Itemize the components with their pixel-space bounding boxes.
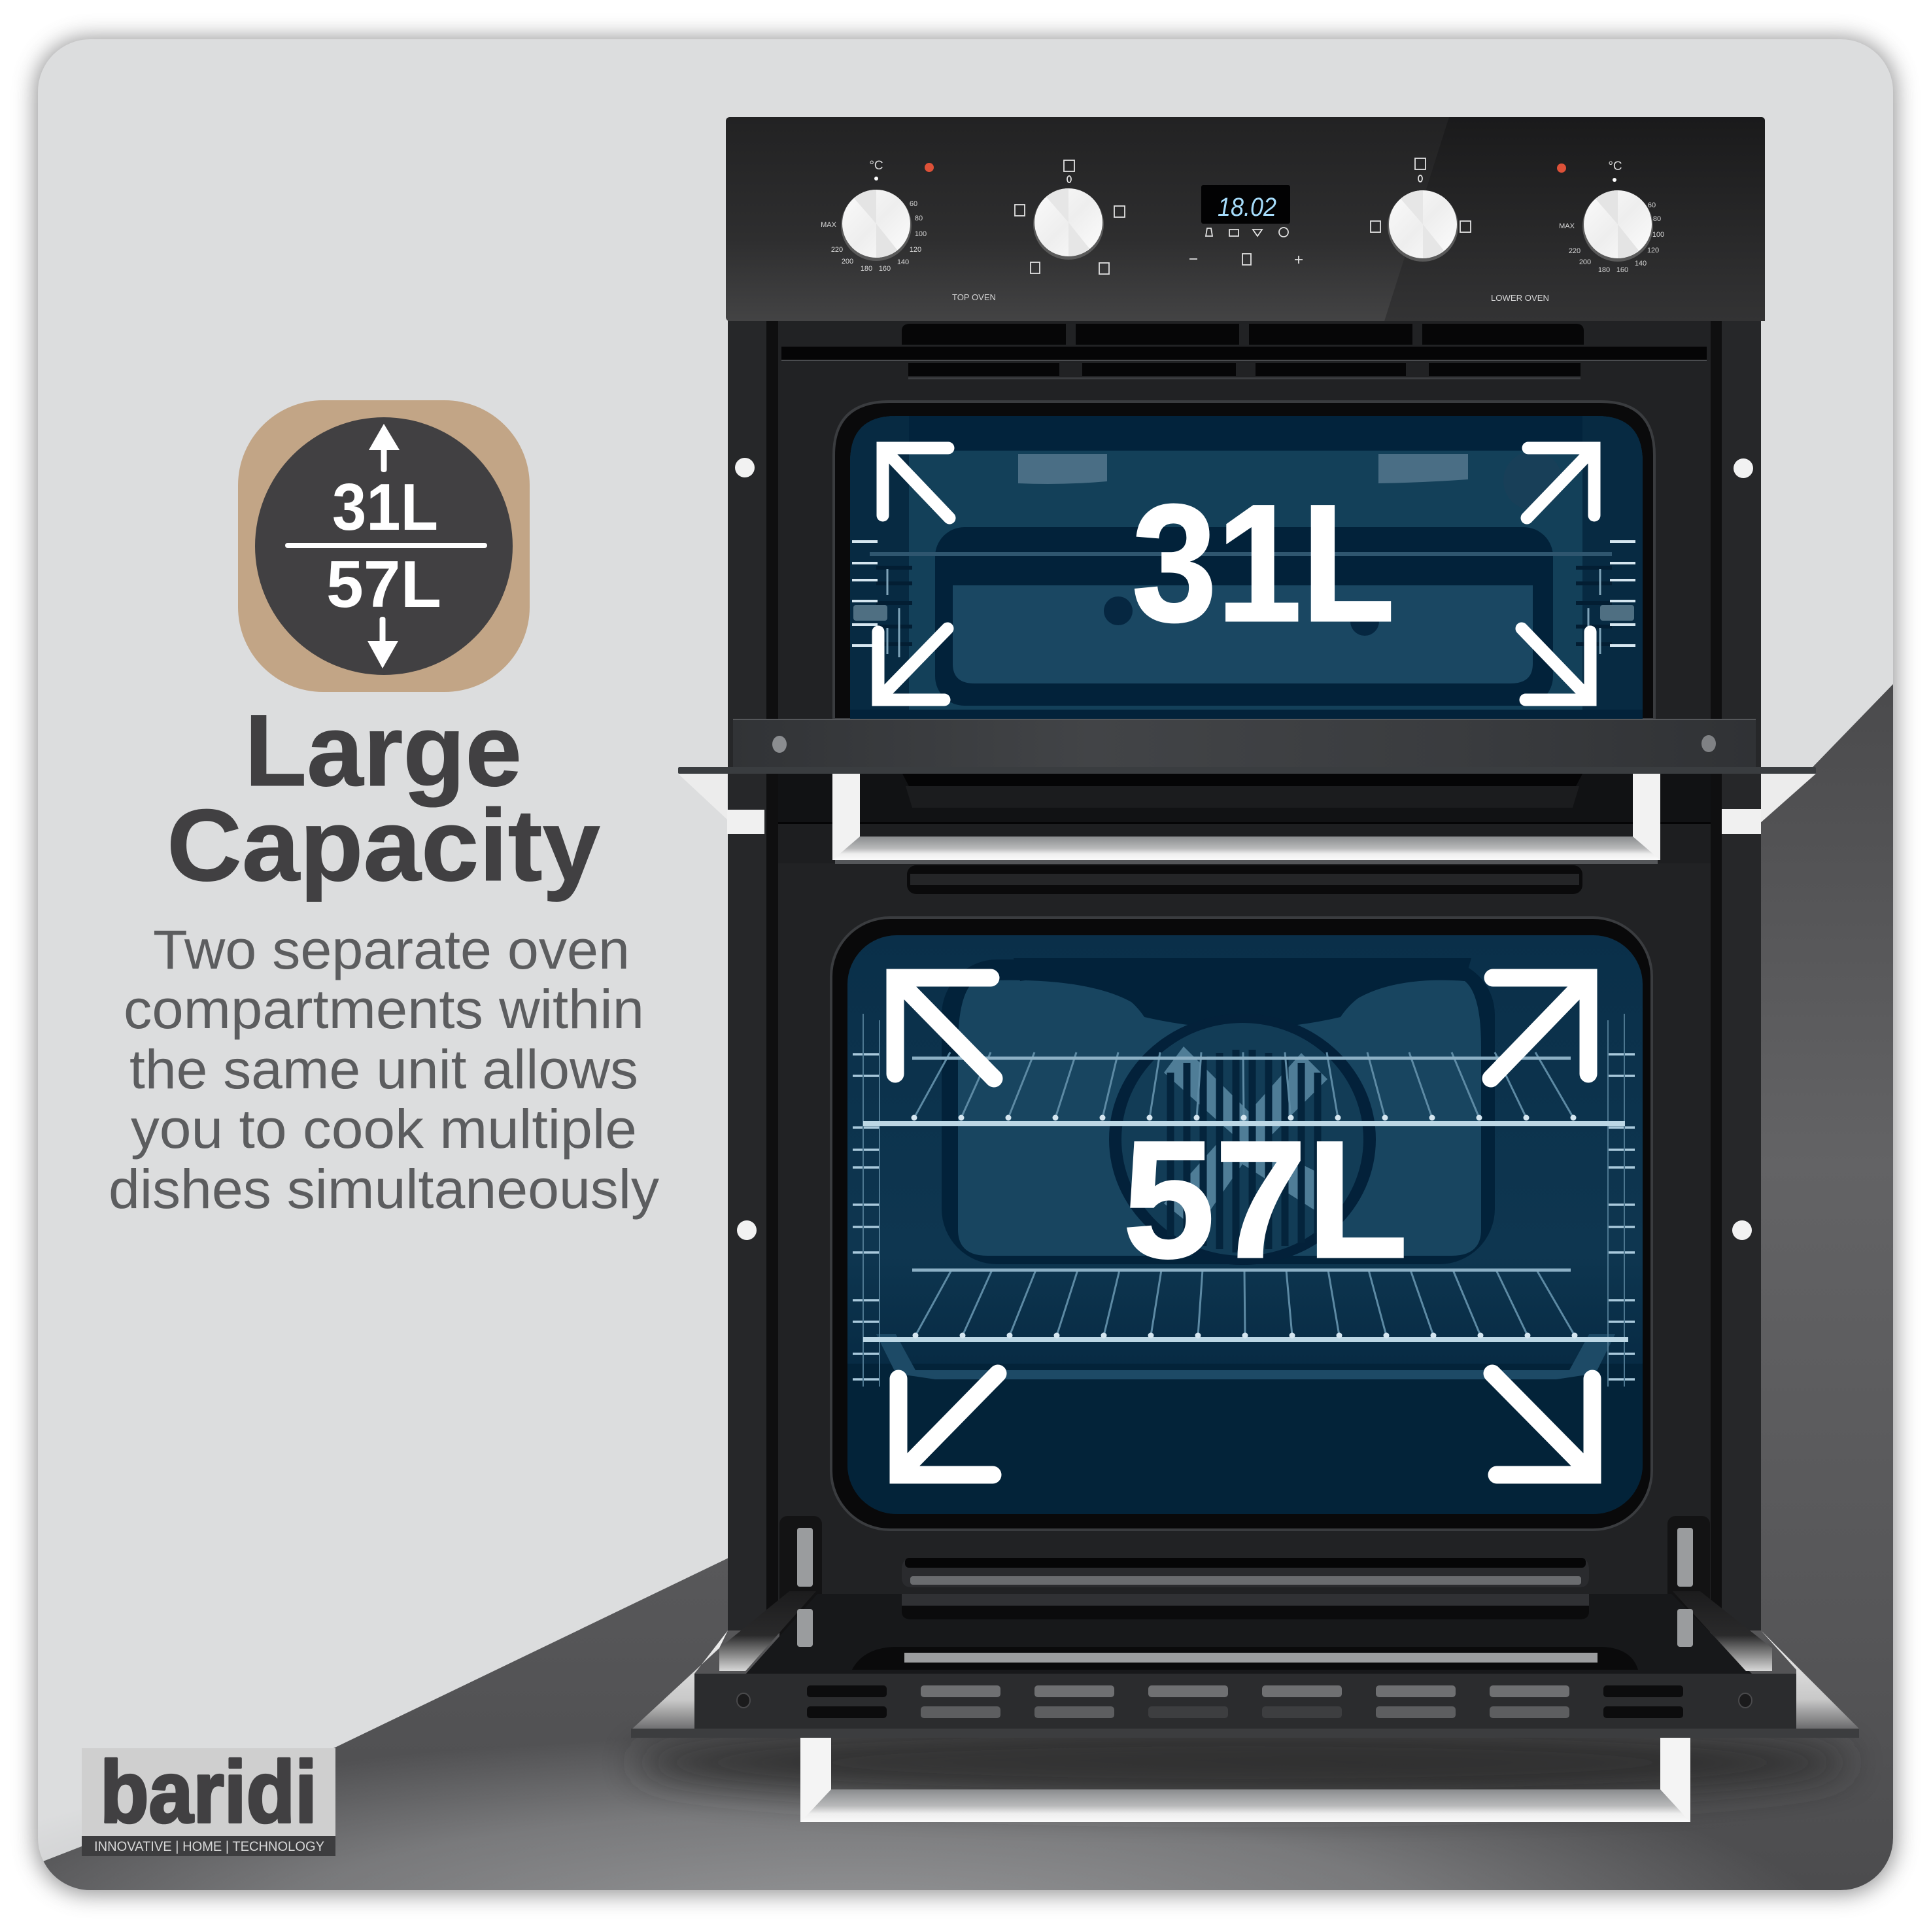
knob: lower function bbox=[1388, 190, 1458, 262]
side rails bbox=[853, 1014, 1635, 1387]
oven rack: top bbox=[863, 1052, 1625, 1124]
lower door handle bbox=[800, 1738, 1690, 1822]
recess behind upper handle bbox=[778, 774, 1711, 863]
label: top oven: TOP OVEN bbox=[952, 292, 996, 302]
oven body bbox=[728, 320, 1761, 1630]
logo: baridi: INNOVATIVE | HOME | TECHNOLOGY bbox=[94, 1839, 324, 1854]
temperature scale: top oven: 80 bbox=[915, 215, 923, 222]
temperature scale: top oven: 200 bbox=[842, 258, 853, 266]
temperature scale: top oven: 180 bbox=[861, 265, 872, 273]
badge: capacity icon bbox=[238, 400, 530, 692]
knob: top temperature bbox=[841, 190, 912, 261]
temperature scale: top oven: °C bbox=[869, 159, 883, 173]
oven bbox=[631, 117, 1859, 1822]
temperature scale: top oven: 140 bbox=[897, 258, 909, 266]
door inner surface bbox=[745, 1594, 1752, 1674]
function icons bbox=[1015, 158, 1471, 274]
indicator lights bbox=[925, 163, 1566, 173]
temperature scale: lower oven: 80 bbox=[1653, 215, 1661, 223]
capacity arrows: upper bbox=[878, 448, 1594, 700]
badge text: 57L: 57L bbox=[326, 548, 441, 621]
dark floor wedge bbox=[38, 684, 1893, 1890]
temperature scale: top oven: MAX bbox=[821, 221, 837, 229]
temperature scale: lower oven: 60 bbox=[1648, 201, 1656, 209]
side rails bbox=[852, 542, 1635, 657]
text: 31L: 31L bbox=[1132, 470, 1395, 657]
badge divider bbox=[285, 543, 487, 548]
logo: baridi: baridi bbox=[100, 1744, 317, 1841]
temperature scale: top oven bbox=[821, 159, 927, 273]
temperature scale: lower oven: 180 bbox=[1598, 266, 1610, 274]
description text: you to cook multiple bbox=[131, 1098, 637, 1160]
description text bbox=[109, 919, 659, 1220]
oven brackets bbox=[1018, 454, 1468, 484]
temperature scale: top oven: 120 bbox=[910, 246, 921, 254]
hinge recesses bbox=[779, 1516, 1710, 1655]
upper door handle bbox=[832, 774, 1660, 864]
description text: dishes simultaneously bbox=[109, 1158, 659, 1220]
heading: Large bbox=[245, 694, 522, 808]
knob: top function bbox=[1033, 188, 1104, 260]
digital display bbox=[1201, 185, 1290, 224]
temperature scale: lower oven: 200 bbox=[1579, 258, 1591, 266]
temperature scale: lower oven: °C bbox=[1608, 160, 1622, 173]
temperature scale: top oven: 60 bbox=[910, 200, 917, 208]
digital display: 18.02 bbox=[1218, 193, 1276, 222]
lower door bbox=[631, 1528, 1859, 1822]
door block with vents bbox=[694, 1674, 1796, 1729]
heading bbox=[167, 694, 600, 903]
baking tray bbox=[935, 527, 1553, 706]
glass reflections beside top door bbox=[678, 774, 1816, 834]
oven rack: bottom bbox=[863, 1270, 1628, 1339]
door side arms bbox=[719, 1591, 1772, 1671]
temperature scale: lower oven: 100 bbox=[1652, 231, 1664, 239]
temperature scale: lower oven: 120 bbox=[1647, 247, 1659, 254]
floor bbox=[847, 1364, 1643, 1514]
icon: down arrow bbox=[367, 617, 398, 668]
temperature scale: lower oven: 220 bbox=[1569, 247, 1581, 255]
temperature scale: top oven: 220 bbox=[831, 246, 843, 254]
description text: Two separate oven bbox=[153, 919, 630, 980]
label: lower oven: LOWER OVEN bbox=[1491, 293, 1549, 303]
heading: Capacity bbox=[167, 789, 600, 903]
middle vent bbox=[907, 865, 1582, 894]
lower vent bbox=[902, 1558, 1589, 1587]
mounting holes bbox=[735, 458, 1753, 1240]
control panel bbox=[726, 117, 1765, 321]
capacity arrows: lower bbox=[895, 978, 1592, 1475]
temperature scale: lower oven bbox=[1559, 160, 1664, 274]
badge text: 31L: 31L bbox=[332, 471, 438, 544]
upper oven window bbox=[834, 402, 1654, 719]
description text: compartments within bbox=[124, 978, 644, 1040]
temperature scale: lower oven: MAX bbox=[1559, 222, 1575, 230]
back wall bbox=[942, 958, 1495, 1264]
glass reflections bbox=[631, 1630, 1859, 1730]
oven shelf rail bbox=[870, 552, 1612, 556]
knob: lower temperature bbox=[1582, 190, 1653, 262]
icon: up arrow bbox=[369, 424, 400, 472]
temperature scale: top oven: 160 bbox=[879, 265, 891, 273]
temperature scale: lower oven: 140 bbox=[1635, 260, 1647, 267]
temperature scale: top oven: 100 bbox=[915, 230, 927, 238]
text: 57L: 57L bbox=[1123, 1107, 1408, 1293]
fan bbox=[1109, 1014, 1376, 1265]
description text: the same unit allows bbox=[129, 1039, 638, 1100]
hinges bbox=[797, 1528, 1693, 1647]
upper door bar bbox=[678, 719, 1816, 774]
lower oven window bbox=[831, 918, 1652, 1530]
top vents bbox=[781, 324, 1707, 379]
temperature scale: lower oven: 160 bbox=[1616, 266, 1628, 274]
